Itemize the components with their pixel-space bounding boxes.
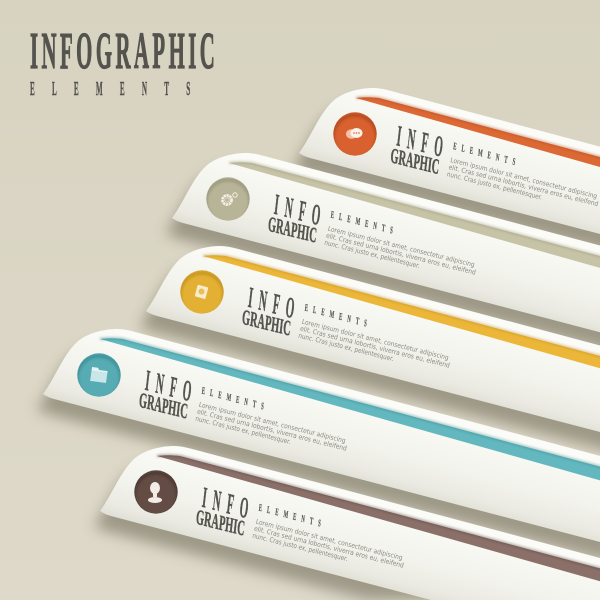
- label: info graphic elements text: nunc. Cras justo ex, pellentesquer.: [298, 332, 395, 363]
- panel: card 5 brown: [94, 446, 600, 600]
- label: info graphic elements text: ELEMENTS: [330, 209, 394, 236]
- label: info graphic elements text: [242, 287, 450, 368]
- label: info graphic elements text: ELEMENTS: [201, 385, 265, 412]
- label: info graphic elements text: GRAPHIC: [267, 212, 318, 248]
- label: info graphic elements text: [268, 194, 476, 274]
- label: info graphic elements text: nunc. Cras justo ex, pellentesquer.: [195, 415, 292, 446]
- label: info graphic elements text: nunc. Cras justo ex, pellentesquer.: [324, 239, 421, 270]
- heading: INFOGRAPHIC: INFOGRAPHIC: [30, 22, 215, 80]
- label: info graphic elements text: ELEMENTS: [304, 302, 368, 329]
- icon: speech bubbles: [346, 128, 362, 139]
- label: info graphic elements text: [140, 370, 347, 450]
- panel: card 1 orange: [290, 88, 600, 246]
- label: info graphic elements text: INFO: [201, 480, 250, 525]
- icon: envelope: [195, 285, 208, 299]
- label: info graphic elements text: nunc. Cras justo ex, pellentesquer.: [252, 532, 349, 563]
- label: info graphic elements text: ELEMENTS: [258, 502, 322, 529]
- label: info graphic elements text: elit. Cras sed urna lobortis, viverra eros eu, eleifend: [196, 408, 348, 453]
- label: info graphic elements text: GRAPHIC: [195, 505, 246, 541]
- label: info graphic elements text: elit. Cras sed urna lobortis, viverra eros eu, eleifend: [299, 325, 451, 370]
- label: info graphic elements text: Lorem ipsum dolor sit amet, consectetur adipiscing: [255, 518, 403, 562]
- label: info graphic elements text: [196, 487, 404, 568]
- label: info graphic elements text: Lorem ipsum dolor sit amet, consectetur adipiscing: [327, 225, 475, 269]
- label: info graphic elements text: GRAPHIC: [389, 143, 441, 179]
- label: info graphic elements text: elit. Cras sed urna lobortis, viverra eros eu, eleifend: [253, 525, 405, 570]
- label: info graphic elements text: Lorem ipsum dolor sit amet, consectetur adipiscing: [301, 318, 449, 362]
- label: info graphic elements text: nunc. Cras justo ex, pellentesquer.: [446, 170, 543, 202]
- label: info graphic elements text: Lorem ipsum dolor sit amet, consectetur adipiscing: [198, 401, 346, 445]
- subheading: ELEMENTS: ELEMENTS: [30, 79, 190, 100]
- title: [30, 22, 215, 100]
- panel: card 2 olive: [162, 153, 600, 346]
- icon: gears: [222, 193, 237, 205]
- label: info graphic elements text: INFO: [395, 119, 445, 163]
- panel: card 3 yellow: [140, 246, 600, 479]
- label: info graphic elements text: INFO: [273, 187, 322, 232]
- label: info graphic elements text: elit. Cras sed urna lobortis, viverra eros eu, eleifend: [325, 232, 477, 277]
- label: info graphic elements text: [391, 126, 598, 206]
- label: info graphic elements text: INFO: [144, 363, 193, 408]
- label: info graphic elements text: GRAPHIC: [138, 388, 189, 424]
- icon: folder: [90, 367, 108, 383]
- icon: person: [148, 482, 162, 503]
- label: info graphic elements text: INFO: [247, 280, 296, 325]
- label: info graphic elements text: GRAPHIC: [241, 305, 292, 341]
- label: info graphic elements text: ELEMENTS: [453, 140, 516, 168]
- panel: card 4 teal: [37, 329, 600, 562]
